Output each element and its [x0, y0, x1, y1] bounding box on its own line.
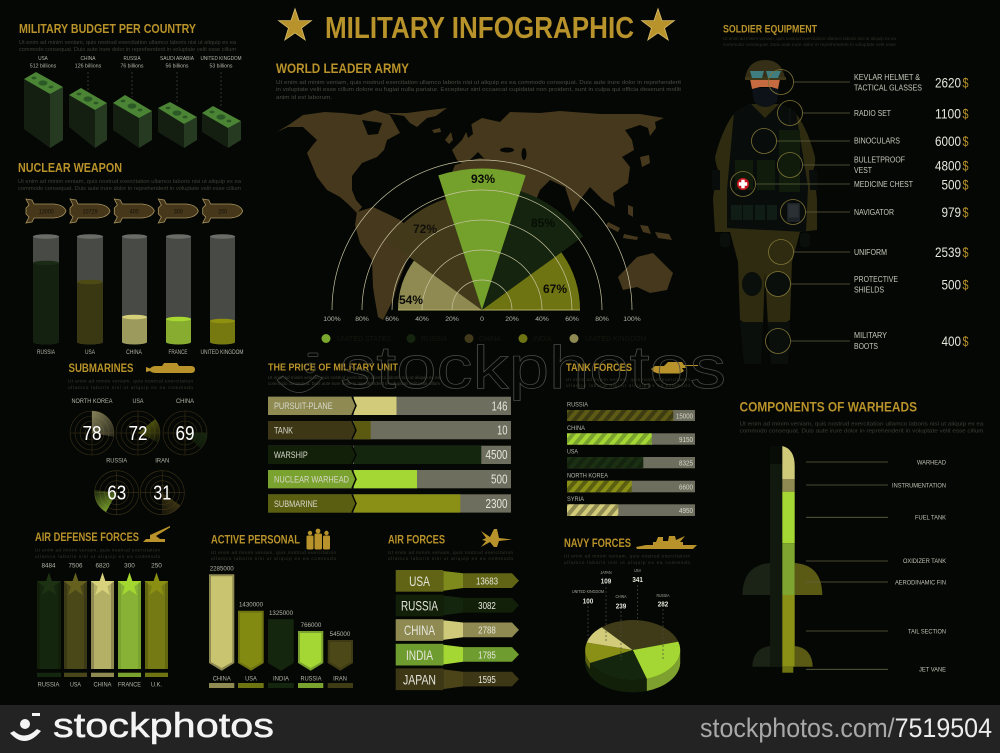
icons: warhead counts: 300 [174, 208, 183, 216]
chart: air defense bars: 8484 [42, 562, 56, 570]
chart: nuclear cylinders: UNITED KINGDOM [200, 349, 244, 356]
chart legend: UNITED KINGDOM [585, 336, 647, 343]
equipment labels: MILITARY [854, 330, 887, 340]
equipment prices: 6000 [935, 133, 961, 149]
text block: personal description [211, 550, 336, 561]
text block: tank description [566, 377, 691, 388]
panel: active personal [209, 529, 353, 688]
chart: tank bars [567, 402, 695, 516]
text block: budget description: commodo consequat. Duis aute irure dolor in reprehenderit in voluptate velit esse cillum [19, 47, 237, 53]
text block: air defense description: Ut enim ad minim veniam, quis nostrud exercitation [35, 548, 160, 552]
chart: navy pie: UNITED KINGDOM [572, 589, 604, 595]
text block: soldier description: Ut enim ad minim veniam, quis nostrud exercitation ullamco laboris nisi ut aliquip ex ea [723, 36, 897, 41]
equipment labels: PROTECTIVE [854, 274, 898, 284]
chart: price bars: SUBMARINE [274, 499, 318, 510]
chart legend: RUSSIA [421, 336, 447, 343]
heading: air forces: AIR FORCES [388, 532, 445, 546]
heading: active personal: ACTIVE PERSONAL [211, 532, 300, 546]
chart: personnel bars: 1325000 [269, 610, 293, 617]
chart: radar wedges: 40% [535, 316, 549, 323]
chart: navy pie: RUSSIA [656, 593, 670, 599]
chart: tank bars: 9150 [679, 435, 693, 444]
panel: air forces [388, 529, 519, 690]
equipment prices: $ [962, 106, 969, 122]
text block: navy description [564, 554, 690, 565]
component labels: WARHEAD [917, 460, 946, 466]
chart: air defense bars: U.K. [151, 682, 162, 688]
panel: air defense forces [35, 526, 170, 688]
chart: air defense bars: 7506 [68, 562, 83, 570]
icons: warhead counts: 13000 [39, 208, 54, 216]
text block: army description [276, 80, 682, 101]
chart: navy pie: CHINA [616, 594, 627, 600]
chart: radar wedges: 72% [413, 222, 437, 236]
component labels [892, 460, 946, 674]
equipment prices [935, 74, 969, 349]
chart: personnel bars: CHINA [213, 676, 231, 682]
text block: price description: Ut enim ad minim veniam, quis nostrud exercitation ullamco laboris nisi ut aliquip ex ea [268, 375, 441, 380]
chart: radar wedges: 60% [385, 316, 399, 323]
chart: money stacks [24, 72, 241, 148]
icons: warhead counts [26, 199, 243, 223]
text block: air forces description: Ut enim ad minim veniam, quis nostrud exercitation [388, 550, 513, 555]
chart legend [322, 334, 647, 343]
chart: air defense bars: 6820 [96, 562, 110, 570]
text block: nuclear description [18, 179, 242, 192]
chart legend: INDIA [533, 336, 552, 343]
text block: price description [268, 375, 441, 386]
budget labels: USA [38, 56, 48, 62]
chart: submarine radars: RUSSIA [106, 458, 128, 464]
text block: army description: in voluptate velit esse cillum dolore eu fugiat nulla pariatur. Excepteur sint occaecat cupidatat non proident, sunt in culpa qui officia deserunt mollit [276, 87, 682, 93]
chart: price bars: 10 [497, 424, 508, 438]
icons: warhead counts: 200 [218, 208, 228, 216]
equipment labels: BINOCULARS [854, 136, 900, 146]
footer logo icon [10, 713, 41, 741]
chart: radar wedges: 100% [623, 316, 641, 323]
chart: tank bars: USA [567, 448, 578, 456]
chart: tank bars: 4950 [679, 506, 693, 515]
chart: radar wedges: 80% [595, 316, 609, 323]
chart: personnel bars: RUSSIA [300, 676, 322, 682]
panel: price of military unit [268, 362, 511, 513]
text block: submarines description: Ut enim ad minim veniam, quis nostrud exercitation [68, 378, 193, 384]
budget labels: SAUDI ARABIA [160, 56, 194, 62]
equipment prices: 400 [942, 333, 961, 349]
chart: nuclear cylinders: FRANCE [168, 349, 188, 356]
text block: warheads description: commodo consequat. Duis aute irure dolor in reprehenderit in voluptate velit esse cillum [740, 428, 984, 434]
chart: radar wedges: 20% [445, 316, 459, 323]
icon: personnel [306, 529, 330, 550]
heading: world leader army: WORLD LEADER ARMY [276, 60, 410, 76]
chart: radar wedges: 80% [355, 316, 369, 323]
chart: navy pie: 341 [632, 575, 643, 584]
chart: navy pie: 109 [601, 576, 611, 586]
chart: submarine radars: CHINA [176, 398, 194, 405]
text block: army description: anim id est laborum. [276, 95, 332, 101]
budget labels: RUSSIA [124, 56, 141, 62]
equipment labels: NAVIGATOR [854, 207, 894, 217]
chart: air force arrows: 2788 [478, 626, 496, 637]
heading: submarines: SUBMARINES [68, 361, 134, 375]
chart: submarine radars: IRAN [155, 458, 169, 464]
chart: air force arrows: 1785 [478, 650, 496, 661]
component labels: FUEL TANK [915, 514, 946, 522]
chart: price bars: PURSUIT-PLANE [274, 401, 333, 412]
chart: price bars [268, 397, 511, 513]
equipment labels: BOOTS [854, 341, 878, 351]
icons: warhead counts: 10729 [82, 208, 98, 216]
chart: tank bars: RUSSIA [567, 402, 588, 408]
chart: air force arrows [396, 570, 519, 690]
chart: personnel bars: USA [245, 676, 257, 682]
heading: navy forces: NAVY FORCES [564, 536, 631, 550]
component labels: INSTRUMENTATION [892, 482, 946, 489]
chart: air force arrows: 3082 [478, 601, 496, 612]
chart: air force arrows: RUSSIA [401, 598, 438, 614]
equipment prices: 2620 [935, 74, 961, 90]
text block: submarines description: ullamco laboris nisi ut aliquip ex ea commodo [68, 385, 193, 391]
text block: nuclear description: commodo consequat. Duis aute irure dolor in reprehenderit in voluptate velit esse cillum [18, 186, 242, 192]
equipment labels: SHIELDS [854, 284, 884, 294]
panel: navy forces [564, 536, 697, 692]
text block: navy description: Ut enim ad minim veniam, quis nostrud exercitation [564, 554, 690, 558]
chart legend: CHINA [479, 336, 501, 343]
footer image url: stockphotos.com/7519504 [700, 713, 992, 743]
text block: air defense description [35, 548, 160, 559]
chart: radar wedges: 40% [415, 316, 429, 323]
component labels: TAIL SECTION [908, 628, 946, 636]
panel: military budget per country [19, 21, 242, 148]
icon: tank [651, 362, 698, 374]
chart: air defense bars: CHINA [94, 682, 112, 688]
chart: radar wedges: 0 [480, 316, 484, 323]
chart: navy pie: 282 [658, 600, 668, 608]
chart: price bars: 500 [491, 472, 508, 486]
equipment labels: VEST [854, 165, 873, 175]
equipment labels: BULLETPROOF [854, 154, 905, 164]
chart: price bars: 2300 [486, 497, 508, 511]
heading: tank forces: TANK FORCES [566, 362, 632, 374]
chart: air force arrows: 13683 [476, 576, 498, 588]
chart: tank bars: 8325 [679, 458, 693, 468]
chart: air defense bars [37, 562, 168, 688]
chart: submarine radars [70, 398, 207, 515]
chart: nuclear cylinders: RUSSIA [37, 349, 55, 356]
chart: submarine radars: 31 [153, 482, 171, 504]
text block: submarines description [68, 378, 193, 391]
text block: price description: commodo consequat. Duis aute irure dolor in reprehenderit in voluptate velit esse cillum [268, 381, 440, 386]
chart: navy pie: USA [634, 568, 642, 574]
chart: radar wedges: 67% [543, 282, 567, 296]
chart: air force arrows: 1595 [478, 675, 496, 686]
equipment prices: $ [962, 176, 969, 192]
chart: tank bars: SYRIA [567, 496, 584, 503]
footer bar [0, 705, 1000, 753]
chart: radar wedges: 54% [399, 293, 423, 307]
chart: price bars: 146 [492, 399, 508, 413]
chart: price bars: 4500 [486, 448, 508, 462]
chart: personnel bars: 2285000 [210, 566, 234, 572]
chart: price bars: TANK [274, 426, 294, 436]
component labels: AERODINAMIC FIN [895, 580, 946, 586]
text block: air forces description: ullamco laboris nisi ut aliquip ex ea commodo [388, 556, 513, 561]
equipment labels [854, 72, 922, 351]
equipment labels: UNIFORM [854, 247, 887, 257]
chart: tank bars: 15000 [676, 412, 693, 420]
text block: army description: Ut enim ad minim veniam, quis nostrud exercitation ullamco laboris nisi ut aliquip ex ea commodo consequat. Duis aute irure dolor in reprehenderit [276, 80, 682, 86]
chart: personnel bars [209, 566, 353, 688]
equipment prices: $ [962, 204, 969, 220]
chart: personnel bars: 545000 [330, 631, 351, 638]
chart legend: UNITED STATES [337, 336, 392, 343]
icons: warhead counts: 400 [130, 208, 139, 216]
equipment prices: $ [962, 244, 969, 260]
equipment prices: 1100 [935, 106, 961, 122]
chart: air defense bars: 300 [124, 562, 135, 570]
chart: submarine radars: NORTH KOREA [72, 398, 113, 405]
chart: submarine radars: USA [132, 398, 144, 405]
equipment prices: 500 [942, 276, 961, 292]
budget labels: 56 billions [166, 64, 189, 70]
chart: navy pie: 100 [583, 596, 593, 606]
chart: price bars: NUCLEAR WARHEAD [274, 474, 349, 486]
equipment prices: 2539 [935, 244, 961, 260]
title: MILITARY INFOGRAPHIC [325, 10, 634, 45]
component labels: OXIDIZER TANK [903, 558, 946, 565]
budget labels: 512 billions [30, 64, 56, 70]
chart: radar wedges: 20% [505, 316, 519, 323]
equipment prices: 4800 [935, 158, 961, 174]
budget labels: 53 billions [210, 64, 233, 70]
text block: warheads description [740, 422, 984, 434]
chart: navy pie: 239 [616, 602, 626, 610]
chart: nuclear cylinders [33, 234, 244, 356]
budget labels: UNITED KINGDOM [200, 56, 242, 62]
text block: budget description [19, 40, 237, 53]
chart: nuclear cylinders: USA [85, 349, 95, 356]
diagram: rocket [742, 446, 822, 673]
heading: soldier equipment: SOLDIER EQUIPMENT [723, 24, 817, 36]
equipment prices: $ [962, 276, 969, 292]
panel: components of warheads [740, 399, 984, 674]
text block: personal description: Ut enim ad minim veniam, quis nostrud exercitation [211, 550, 336, 555]
chart: air defense bars: USA [70, 682, 81, 688]
callout lines [806, 462, 888, 669]
heading: air defense forces: AIR DEFENSE FORCES [35, 530, 139, 544]
equipment labels: MEDICINE CHEST [854, 179, 914, 189]
chart: air force arrows: CHINA [404, 622, 435, 638]
equipment prices: $ [962, 158, 969, 174]
chart: submarine radars: 78 [82, 423, 102, 445]
panel: submarines [68, 361, 207, 515]
panel: soldier equipment [712, 24, 969, 364]
chart: tank bars: 6600 [679, 482, 693, 492]
chart: tank bars: NORTH KOREA [567, 472, 608, 480]
watermark: stockphotos [340, 334, 726, 401]
callout rings [730, 70, 806, 354]
budget labels: 76 billions [120, 64, 144, 70]
text block: tank description: Ut enim ad minim veniam, quis nostrud exercitation [566, 377, 691, 382]
chart: air defense bars: RUSSIA [38, 682, 60, 688]
equipment prices: 979 [942, 204, 961, 220]
equipment prices: 500 [942, 176, 961, 192]
panel: nuclear weapon [18, 160, 244, 356]
icon: anti-aircraft gun [143, 526, 170, 542]
budget labels: CHINA [80, 56, 96, 62]
heading: military budget: MILITARY BUDGET PER COUNTRY [19, 21, 196, 36]
equipment labels: KEVLAR HELMET & [854, 72, 920, 82]
chart: personnel bars: IRAN [333, 676, 347, 682]
world map [277, 108, 673, 320]
callout lines [756, 82, 850, 341]
chart: air defense bars: FRANCE [118, 682, 141, 688]
chart: personnel bars: 1430000 [239, 602, 263, 608]
figure: soldier [712, 60, 818, 364]
chart: radar wedges [323, 160, 641, 323]
chart: navy pie: JAPAN [600, 570, 612, 576]
chart: air force arrows: INDIA [406, 647, 433, 663]
heading: components of warheads: COMPONENTS OF WARHEADS [740, 399, 917, 415]
text block: warheads description: Ut enim ad minim veniam, quis nostrud exercitation ullamco laboris nisi ut aliquip ex ea [740, 422, 984, 428]
component labels: JET VANE [919, 666, 946, 674]
icon: submarine [146, 363, 195, 373]
equipment prices: $ [962, 74, 969, 90]
chart: submarine radars: 69 [176, 423, 194, 445]
chart: air defense bars: 250 [151, 562, 162, 570]
chart: personnel bars: INDIA [273, 676, 289, 682]
icon: warship [636, 536, 697, 549]
chart: personnel bars: 766000 [301, 622, 322, 629]
footer logo text: stockphotos [53, 707, 274, 745]
text block: personal description: ullamco laboris nisi ut aliquip ex ea commodo [211, 556, 336, 561]
text block: budget description: Ut enim ad minim veniam, quis nostrud exercitation ullamco laboris nisi ut aliquip ex ea [19, 40, 236, 46]
budget labels [30, 56, 242, 70]
chart: air force arrows: USA [409, 573, 430, 589]
chart: air force arrows: JAPAN [403, 671, 436, 687]
chart: nuclear cylinders: CHINA [126, 349, 142, 356]
chart: radar wedges: 100% [323, 316, 341, 323]
text block: soldier description: commodo consequat. Duis aute irure dolor in reprehenderit in voluptate velit esse [723, 42, 897, 47]
chart: tank bars: CHINA [567, 425, 585, 432]
text block: air defense description: ullamco laboris nisi ut aliquip ex ea commodo [35, 554, 160, 559]
icon: fighter jet [481, 529, 512, 547]
heading: nuclear weapon: NUCLEAR WEAPON [18, 160, 122, 175]
chart: price bars: WARSHIP [274, 450, 308, 461]
chart: radar wedges: 93% [471, 172, 495, 186]
text block: soldier description [723, 36, 897, 47]
text block: nuclear description: Ut enim ad minim veniam, quis nostrud exercitation ullamco laboris nisi ut aliquip ex ea [18, 179, 241, 185]
map seas [362, 120, 526, 160]
text block: tank description: ullamco laboris nisi ut aliquip ex ea commodo [566, 383, 691, 388]
chart: submarine radars: 63 [107, 482, 126, 504]
chart: navy pie [572, 568, 680, 692]
text block: navy description: ullamco laboris nisi ut aliquip ex ea commodo [564, 560, 690, 565]
equipment labels: RADIO SET [854, 108, 892, 118]
chart: radar wedges: 85% [531, 216, 555, 230]
chart: submarine radars: 72 [128, 423, 148, 445]
text block: air forces description [388, 550, 513, 561]
equipment prices: $ [962, 133, 969, 149]
chart: radar wedges: 60% [565, 316, 579, 323]
heading: price of military unit: THE PRICE OF MILITARY UNIT [268, 362, 398, 374]
equipment labels: TACTICAL GLASSES [854, 82, 922, 92]
icon: medicine chest [737, 178, 749, 190]
equipment prices: $ [962, 333, 969, 349]
panel: tank forces [566, 362, 698, 516]
budget labels: 126 billions [75, 64, 101, 70]
panel: world leader army [276, 60, 682, 343]
